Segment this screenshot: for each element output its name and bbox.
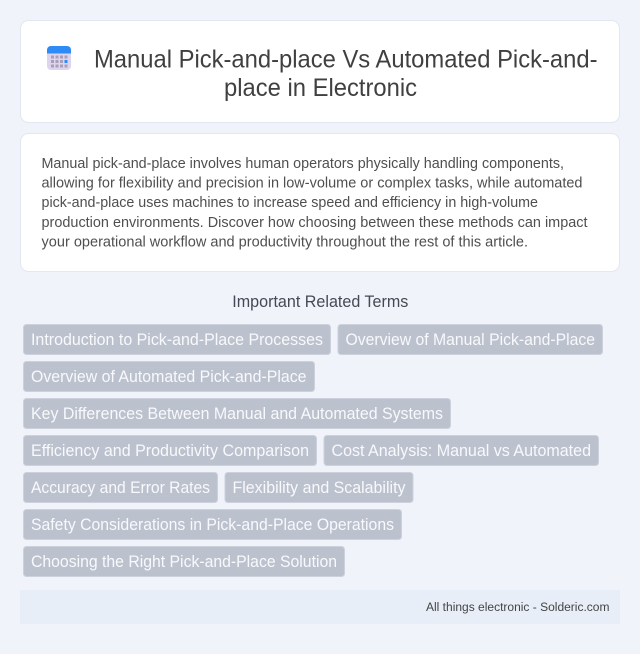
tag: efficiency (24, 436, 316, 466)
related terms tags (24, 324, 602, 576)
tag: efficiency: Efficiency and Productivity Comparison (31, 442, 309, 460)
text block: introduction: your operational workflow and productivity throughout the rest of this article. (42, 234, 528, 250)
tag: key differences: Key Differences Between Manual and Automated Systems (31, 405, 443, 423)
title: place in Electronic (224, 74, 417, 102)
tag: safety: Safety Considerations in Pick-and-Place Operations (31, 516, 394, 534)
text block: introduction: Manual pick-and-place involves human operators physically handling components, (42, 156, 564, 172)
tag: manual overview: Overview of Manual Pick-and-Place (346, 331, 595, 349)
tag: automated overview: Overview of Automated Pick-and-Place (31, 368, 306, 386)
tag: introduction: Introduction to Pick-and-Place Processes (31, 331, 323, 349)
tag: accuracy: Accuracy and Error Rates (31, 479, 210, 497)
tag: choosing solution (24, 546, 344, 576)
text block: introduction: production environments. Discover how choosing between these methods can impact (42, 215, 588, 231)
text block: introduction: allowing for flexibility and precision in low-volume or complex tasks, while automated (42, 176, 582, 192)
tag: flexibility: Flexibility and Scalability (232, 479, 406, 497)
tag: key differences (24, 398, 450, 428)
icon: calendar (47, 46, 71, 70)
tag: cost analysis (324, 436, 598, 466)
tag: automated overview (24, 362, 314, 392)
tag: introduction (24, 324, 330, 354)
tag: safety (24, 510, 402, 540)
tag: cost analysis: Cost Analysis: Manual vs Automated (332, 442, 591, 460)
tag: flexibility (225, 472, 413, 502)
tag: accuracy (24, 472, 218, 502)
text block: introduction (42, 156, 588, 250)
tag: manual overview (338, 324, 602, 354)
title: Manual Pick-and-place Vs Automated Pick-and- (94, 46, 598, 74)
footer: All things electronic - Solderic.com (426, 600, 610, 614)
tag: choosing solution: Choosing the Right Pick-and-Place Solution (31, 553, 337, 571)
text block: introduction: pick-and-place uses machines to increase speed and efficiency in high-volume (42, 195, 538, 211)
footer (20, 590, 620, 624)
panel: introduction text (20, 134, 620, 272)
panel: title card (20, 20, 620, 122)
heading: important related terms: Important Related Terms (232, 293, 408, 311)
title (94, 46, 598, 102)
